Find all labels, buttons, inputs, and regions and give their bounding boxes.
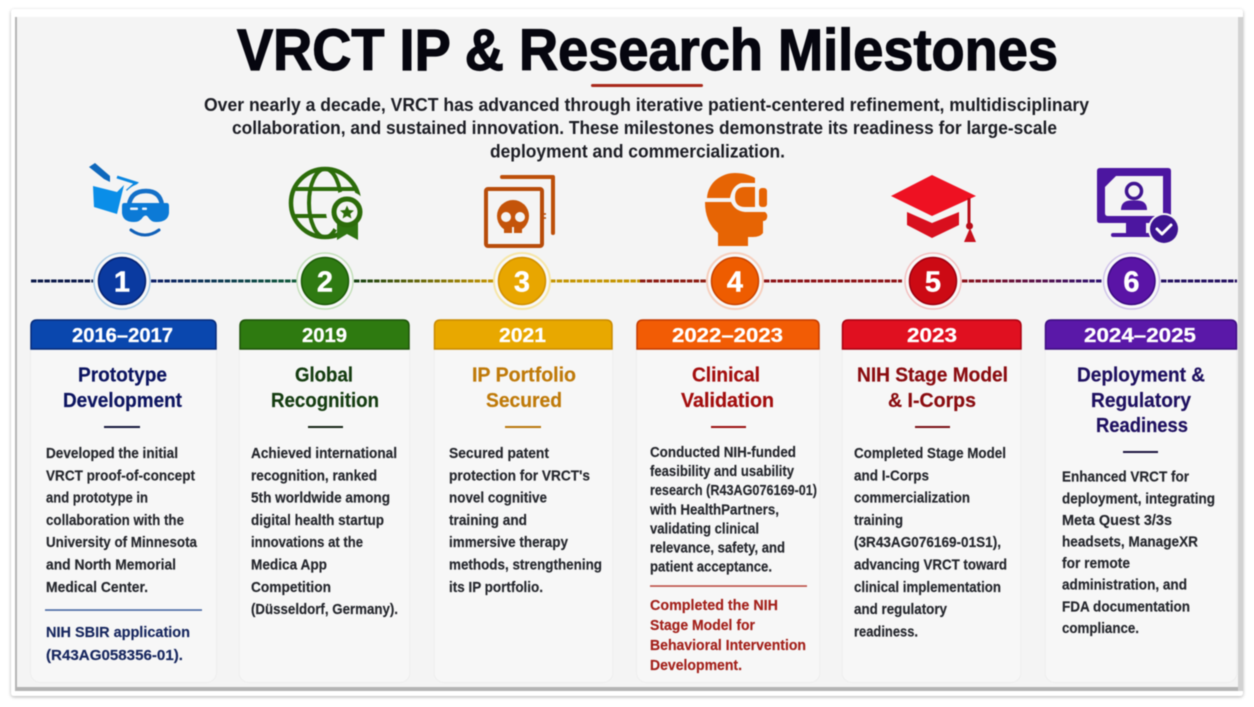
icon: globe with award badge (291, 169, 368, 240)
card heading: Recognition (271, 389, 379, 412)
card body: methods, strengthening (449, 558, 602, 574)
card body: advancing VRCT toward (854, 558, 1007, 574)
year header: 2016–2017 (72, 325, 173, 347)
card body: Enhanced VRCT for (1062, 470, 1189, 486)
card body: Achieved international (251, 446, 397, 462)
year header (637, 320, 819, 349)
year header (240, 320, 409, 349)
card body: (3R43AG076169-01S1), (854, 535, 1001, 551)
card body: Developed the initial (46, 446, 178, 462)
card body: and North Memorial (46, 558, 176, 574)
card heading (681, 364, 774, 428)
card heading: IP Portfolio (472, 364, 576, 386)
card body: and regulatory (854, 602, 947, 618)
year header (1046, 320, 1236, 349)
year header: 2024–2025 (1084, 325, 1196, 347)
card body: Meta Quest 3/3s (1062, 513, 1172, 529)
icon: box, pencil and VR headset (89, 163, 170, 235)
card body (854, 446, 1007, 640)
card body: feasibility and usability (650, 464, 794, 480)
card note: Stage Model for (650, 618, 755, 634)
panel: 2016–2017 prototype development (30, 320, 216, 682)
panel: 2023 NIH stage model and I-Corps (842, 320, 1021, 682)
card body: training and (449, 513, 527, 529)
card body: and prototype in (46, 491, 148, 507)
card body: Medical Center. (46, 580, 148, 596)
icon: monitor with user and check badge (1097, 168, 1180, 245)
card body (449, 446, 602, 596)
card body (1062, 470, 1215, 637)
subtitle: deployment and commercialization. (490, 142, 785, 162)
icon: patent document with skull (486, 177, 553, 246)
marker 5 (905, 253, 961, 309)
card heading: Regulatory (1091, 389, 1192, 412)
card note: NIH SBIR application (46, 625, 190, 641)
card body: immersive therapy (449, 535, 568, 551)
marker 4 (707, 253, 763, 309)
panel: 2024–2025 deployment and regulatory readiness (1045, 320, 1237, 682)
card body: administration, and (1062, 578, 1187, 594)
card body: readiness. (854, 624, 918, 640)
panel: 2021 IP portfolio secured (434, 320, 613, 682)
card note (650, 598, 806, 674)
title: VRCT IP & Research Milestones (237, 18, 1058, 83)
card body: Medica App (251, 558, 327, 574)
year header: 2022–2023 (672, 325, 783, 347)
year header: 2021 (499, 325, 546, 347)
card body: relevance, safety, and (650, 540, 785, 556)
card heading (472, 364, 576, 428)
card body: Competition (251, 580, 331, 596)
marker 5: 5 (925, 266, 941, 298)
card heading: Global (295, 364, 353, 386)
card body: University of Minnesota (46, 535, 198, 551)
card heading: Prototype (78, 364, 167, 386)
card body (251, 446, 398, 618)
card body: research (R43AG076169-01) (650, 483, 817, 499)
year header: 2019 (302, 325, 347, 347)
card body: innovations at the (251, 535, 363, 551)
year header (31, 320, 216, 349)
card body: novel cognitive (449, 491, 547, 507)
year header: 2023 (907, 325, 957, 347)
panel: 2022–2023 clinical validation (636, 320, 820, 682)
card body: Secured patent (449, 446, 549, 462)
marker 4: 4 (727, 266, 743, 298)
card body: patient acceptance. (650, 560, 772, 576)
card heading (63, 364, 182, 428)
marker 2: 2 (317, 266, 333, 298)
card note: Development. (650, 658, 742, 674)
title underline (591, 84, 703, 87)
card body: commercialization (854, 491, 970, 507)
marker 3: 3 (514, 266, 530, 298)
card body: and I-Corps (854, 468, 929, 484)
subtitle: collaboration, and sustained innovation. These milestones demonstrate its readiness for large-scale (232, 118, 1057, 138)
card body: clinical implementation (854, 580, 1001, 596)
card body: for remote (1062, 556, 1130, 572)
marker 1: 1 (114, 266, 130, 298)
card heading: Clinical (692, 364, 760, 386)
subtitle (204, 95, 1089, 162)
marker 1 (94, 253, 150, 309)
card body: with HealthPartners, (649, 502, 779, 518)
card heading: Readiness (1096, 414, 1188, 437)
card body: digital health startup (251, 513, 384, 529)
card body: recognition, ranked (251, 468, 377, 484)
card note (46, 625, 190, 664)
card heading (1077, 364, 1205, 453)
card body: Conducted NIH-funded (650, 445, 796, 461)
card note: (R43AG058356-01). (46, 648, 183, 664)
card body: training (854, 513, 903, 529)
card note: Behavioral Intervention (650, 638, 806, 654)
year header (434, 320, 612, 349)
card heading: NIH Stage Model (857, 364, 1008, 386)
marker 6 (1104, 253, 1160, 309)
card heading: Deployment & (1077, 364, 1205, 386)
timeline connector (31, 280, 1237, 282)
card body: FDA documentation (1062, 599, 1190, 615)
marker 2 (297, 253, 353, 309)
card body (46, 446, 198, 596)
card heading (857, 364, 1008, 428)
icon: graduation cap (891, 175, 976, 242)
card note: Completed the NIH (650, 598, 778, 614)
marker 6: 6 (1123, 266, 1140, 298)
card heading (271, 364, 379, 428)
card body: Completed Stage Model (854, 446, 1006, 462)
card heading: & I-Corps (888, 389, 976, 412)
card body (649, 445, 817, 576)
year header (842, 320, 1021, 349)
card body: deployment, integrating (1062, 491, 1215, 507)
icon: head with VR headset (705, 173, 767, 246)
card heading: Development (63, 389, 182, 412)
card body: 5th worldwide among (251, 491, 390, 507)
card body: collaboration with the (46, 513, 184, 529)
card heading: Secured (486, 389, 562, 412)
card body: (Düsseldorf, Germany). (251, 602, 398, 618)
card body: compliance. (1062, 621, 1139, 637)
card body: its IP portfolio. (449, 580, 543, 596)
card body: VRCT proof-of-concept (46, 468, 195, 484)
subtitle: Over nearly a decade, VRCT has advanced through iterative patient-centered refinement, multidisciplinary (204, 95, 1089, 115)
marker 3 (494, 253, 550, 309)
card body: protection for VRCT's (449, 468, 590, 484)
panel: 2019 global recognition (239, 320, 410, 682)
card body: headsets, ManageXR (1062, 534, 1198, 550)
card body: validating clinical (650, 521, 759, 537)
card heading: Validation (681, 389, 774, 412)
